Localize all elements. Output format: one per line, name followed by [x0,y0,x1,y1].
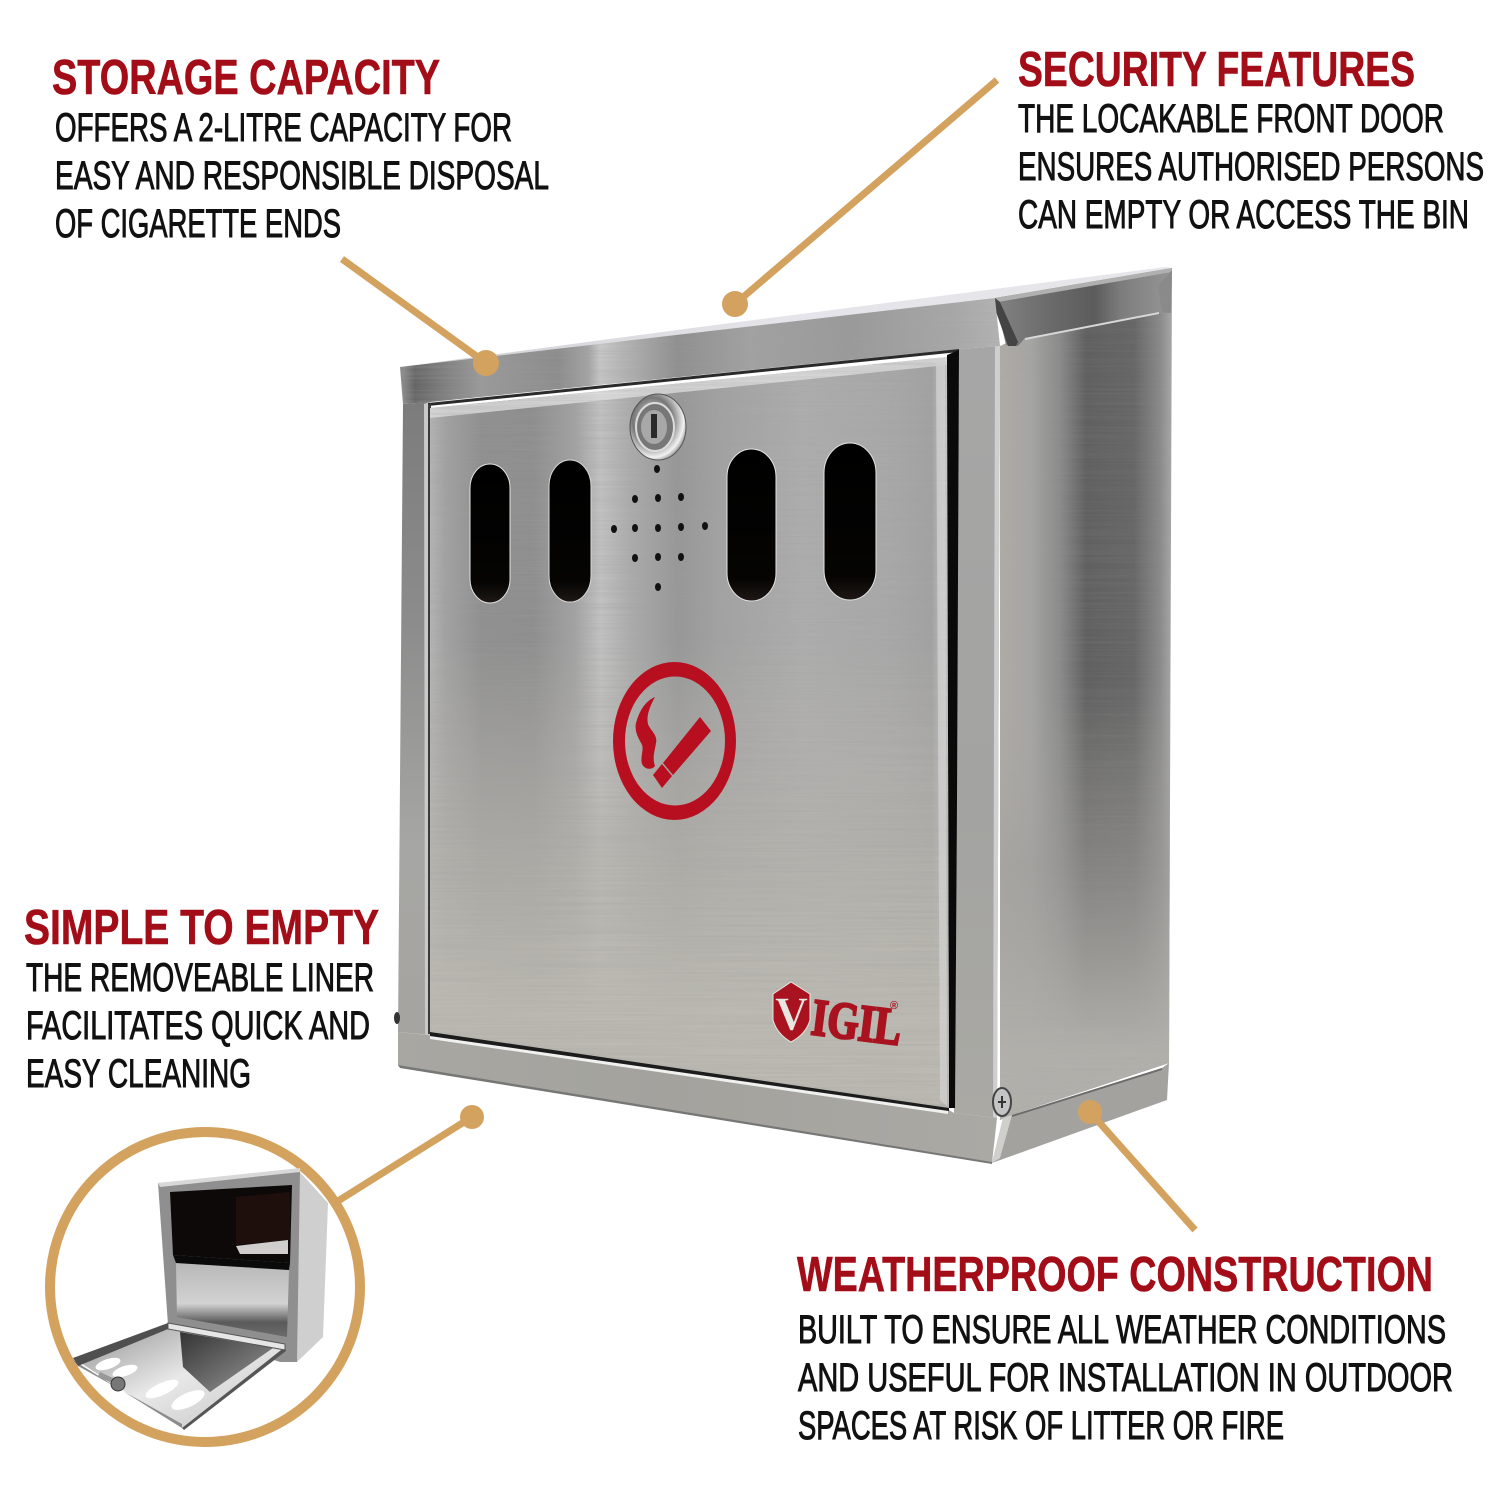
VIGIL logo [773,982,905,1057]
text: simple to empty body: THE REMOVEABLE LINER [26,956,374,1000]
text: security features body [1018,97,1484,237]
door lock [630,394,686,460]
side bottom flap [992,1063,1169,1163]
inset lock [98,1372,125,1391]
inset: open bin photo in circle [50,1132,360,1442]
product photo: stainless steel wall bin [394,267,1175,1164]
door panel [425,355,955,1120]
slots [470,443,876,603]
callout line: simple to empty [338,1105,484,1201]
front frame left strip [398,402,430,1035]
inset bin frame [158,1170,300,1362]
ventilation dots [611,465,708,591]
text: storage capacity body: OFFERS A 2-LITRE CAPACITY FOR [55,106,512,150]
front frame top band [400,298,1000,408]
callout line: storage capacity [342,259,499,376]
no smoking style sign [613,662,736,820]
callout line: security features [722,80,997,317]
text: storage capacity body: OF CIGARETTE ENDS [55,202,341,246]
text: weatherproof construction body: SPACES AT RISK OF LITTER OR FIRE [798,1404,1284,1448]
inset liner [176,1263,289,1337]
heading: simple to empty: SIMPLE TO EMPTY [24,901,379,955]
front frame bottom band [398,1032,997,1163]
front frame right strip [954,346,1000,1118]
VIGIL logo: V [775,988,808,1041]
inset bin dark interior [170,1185,292,1263]
inset open door [73,1325,285,1428]
text: simple to empty body: EASY CLEANING [26,1052,251,1096]
inset bin side [297,1170,328,1362]
screws [394,1012,1011,1116]
text: simple to empty body: FACILITATES QUICK AND [26,1004,370,1048]
side top flap [995,268,1172,346]
top surface highlight [400,267,1172,367]
door recess shadow [428,349,959,406]
text: weatherproof construction body [798,1308,1453,1448]
VIGIL logo: IGIL [809,989,905,1057]
inset door slots [96,1358,204,1410]
text: storage capacity body: EASY AND RESPONSIBLE DISPOSAL [55,154,549,198]
text: simple to empty body [26,956,374,1096]
callout line: weatherproof construction [1078,1100,1195,1230]
VIGIL logo: ® [890,1000,898,1012]
text: storage capacity body [55,106,549,246]
side panel [995,268,1175,1130]
heading: storage capacity: STORAGE CAPACITY [52,51,440,105]
